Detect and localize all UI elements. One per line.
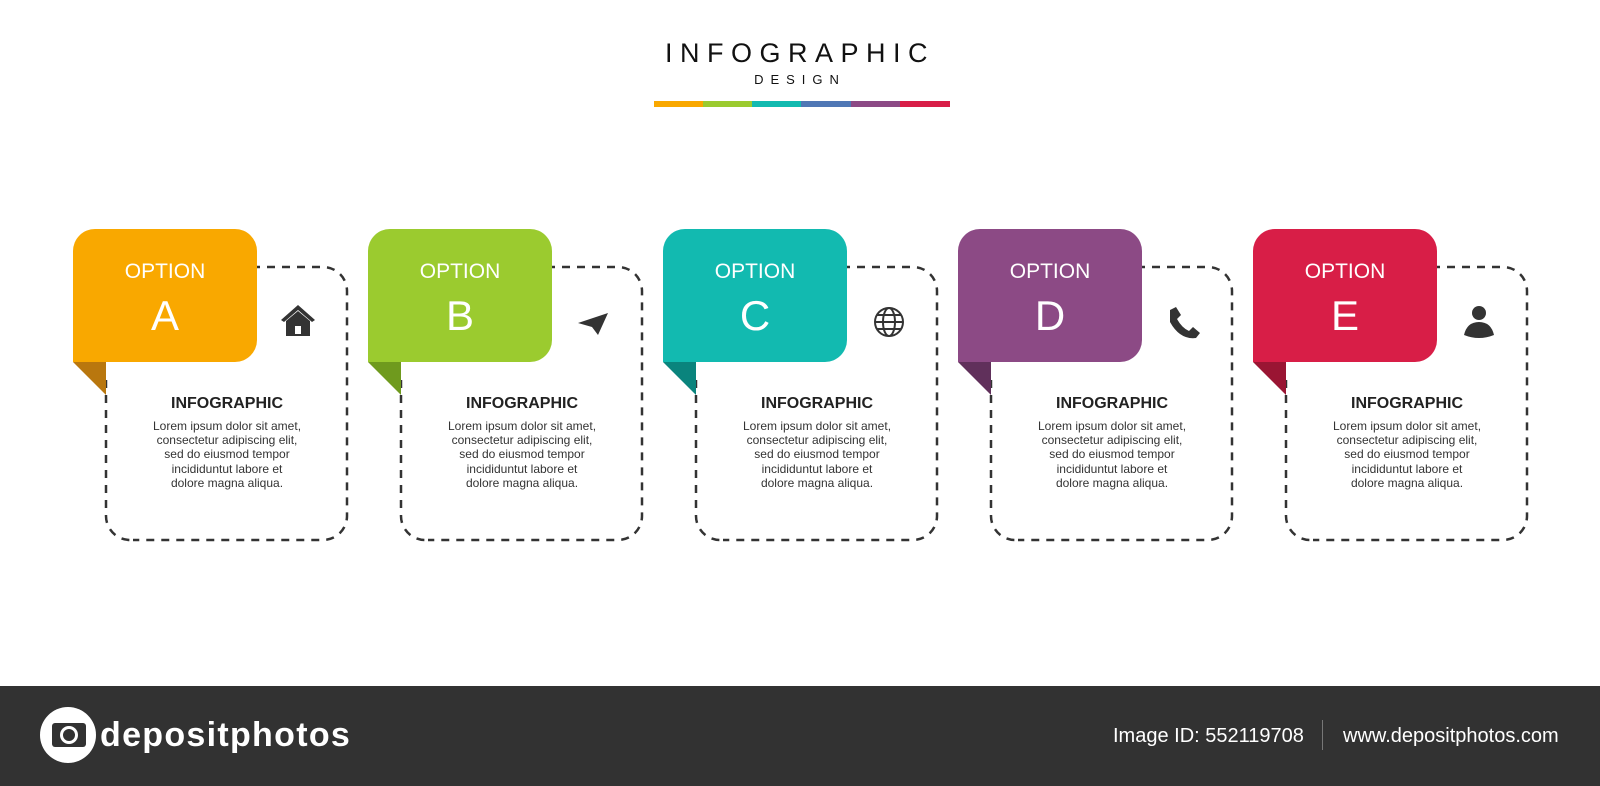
panel: option D: Lorem ipsum dolor sit amet, bbox=[1038, 419, 1186, 433]
footer bar: Image ID: 552119708 bbox=[1113, 725, 1304, 747]
panel: option D: OPTION bbox=[1010, 260, 1090, 283]
panel: option E: dolore magna aliqua. bbox=[1351, 476, 1463, 490]
panel: option B: INFOGRAPHIC bbox=[466, 395, 578, 412]
icon: home bbox=[281, 305, 315, 336]
panel: option D: sed do eiusmod tempor bbox=[1049, 447, 1175, 461]
panel: option C: INFOGRAPHIC bbox=[761, 395, 873, 412]
icon: globe bbox=[875, 308, 903, 336]
panel: option E: consectetur adipiscing elit, bbox=[1337, 433, 1477, 447]
panel: option D: INFOGRAPHIC bbox=[1056, 395, 1168, 412]
footer bar: depositphotos bbox=[100, 716, 351, 754]
footer bar: www.depositphotos.com bbox=[1342, 725, 1559, 747]
panel: option A: OPTION bbox=[125, 260, 205, 283]
title bbox=[654, 38, 950, 107]
panel: option D: incididuntut labore et bbox=[1057, 462, 1168, 476]
panel: option C: OPTION bbox=[715, 260, 795, 283]
panel: option C: consectetur adipiscing elit, bbox=[747, 433, 887, 447]
panel: option D: D bbox=[1035, 292, 1065, 339]
panel: option C bbox=[663, 229, 937, 550]
panel: option A: Lorem ipsum dolor sit amet, bbox=[153, 419, 301, 433]
logo icon bbox=[40, 707, 96, 763]
panel: option C: incididuntut labore et bbox=[762, 462, 873, 476]
panel: option B: dolore magna aliqua. bbox=[466, 476, 578, 490]
panel: option E: OPTION bbox=[1305, 260, 1385, 283]
panel: option A: dolore magna aliqua. bbox=[171, 476, 283, 490]
footer bar bbox=[0, 686, 1600, 786]
panel: option A: sed do eiusmod tempor bbox=[164, 447, 290, 461]
panel: option C: Lorem ipsum dolor sit amet, bbox=[743, 419, 891, 433]
panel: option E: E bbox=[1331, 292, 1359, 339]
panel: option A: consectetur adipiscing elit, bbox=[157, 433, 297, 447]
panel: option A: incididuntut labore et bbox=[172, 462, 283, 476]
panel: option A bbox=[73, 229, 347, 550]
panel: option A: A bbox=[151, 292, 179, 339]
panel: option B: consectetur adipiscing elit, bbox=[452, 433, 592, 447]
icon: phone bbox=[1170, 307, 1200, 338]
panel: option E: incididuntut labore et bbox=[1352, 462, 1463, 476]
panel: option C: C bbox=[740, 292, 770, 339]
panel: option C: dolore magna aliqua. bbox=[761, 476, 873, 490]
title: INFOGRAPHIC bbox=[665, 38, 935, 68]
panel: option B bbox=[368, 229, 642, 550]
panel: option D: consectetur adipiscing elit, bbox=[1042, 433, 1182, 447]
icon: user bbox=[1464, 306, 1494, 338]
panel: option D bbox=[958, 229, 1232, 550]
panel: option B: incididuntut labore et bbox=[467, 462, 578, 476]
panel: option B: OPTION bbox=[420, 260, 500, 283]
icon: paper plane bbox=[578, 313, 608, 335]
panel: option E: Lorem ipsum dolor sit amet, bbox=[1333, 419, 1481, 433]
panel: option D: dolore magna aliqua. bbox=[1056, 476, 1168, 490]
panel: option A: INFOGRAPHIC bbox=[171, 395, 283, 412]
panel: option E: INFOGRAPHIC bbox=[1351, 395, 1463, 412]
panel: option C: sed do eiusmod tempor bbox=[754, 447, 880, 461]
panel: option E bbox=[1253, 229, 1527, 550]
panel: option E: sed do eiusmod tempor bbox=[1344, 447, 1470, 461]
title: DESIGN bbox=[754, 72, 846, 87]
panel: option B: sed do eiusmod tempor bbox=[459, 447, 585, 461]
panel: option B: Lorem ipsum dolor sit amet, bbox=[448, 419, 596, 433]
panel: option B: B bbox=[446, 292, 474, 339]
